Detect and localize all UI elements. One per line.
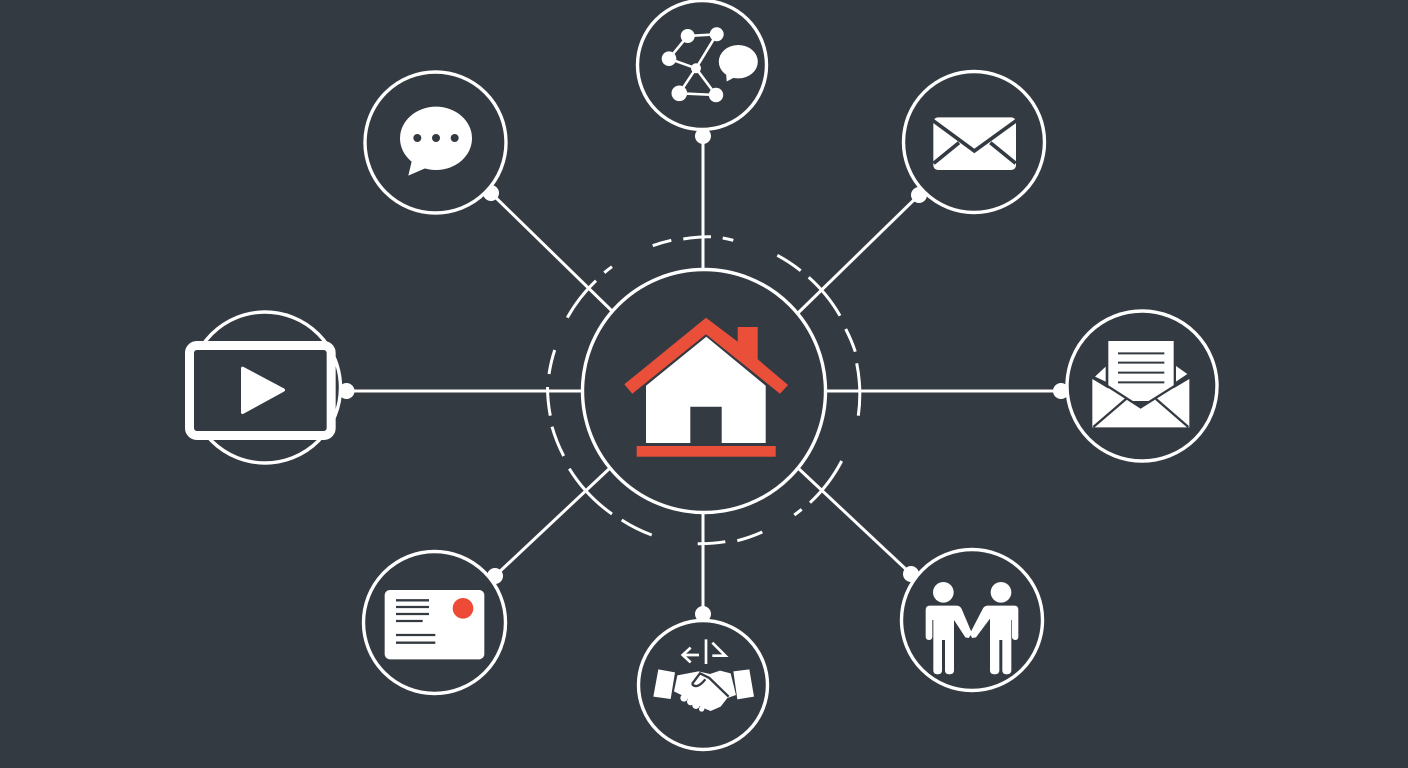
- icon: code arrows and handshake: [653, 639, 754, 712]
- node: partnership: [638, 620, 768, 750]
- icon: network graph with speech bubble: [662, 27, 758, 102]
- node: email: [904, 72, 1044, 212]
- central hub: [582, 270, 826, 512]
- icon: speech bubble: [400, 107, 472, 176]
- node: chat: [365, 72, 506, 213]
- icon: two people holding hands: [926, 582, 1018, 674]
- icon: house: [624, 318, 788, 457]
- dashed ring around hub: [548, 237, 860, 544]
- node: video: [189, 312, 340, 463]
- node: open mail: [1067, 311, 1217, 461]
- node: people: [902, 550, 1042, 690]
- node: network and chat: [638, 0, 766, 130]
- icon: closed envelope: [933, 117, 1017, 170]
- icon: open envelope with letter: [1092, 341, 1190, 427]
- icon: video player: [189, 345, 331, 435]
- connector spokes: [338, 128, 1069, 622]
- icon: card with red dot: [385, 590, 484, 659]
- node: document card: [364, 552, 506, 694]
